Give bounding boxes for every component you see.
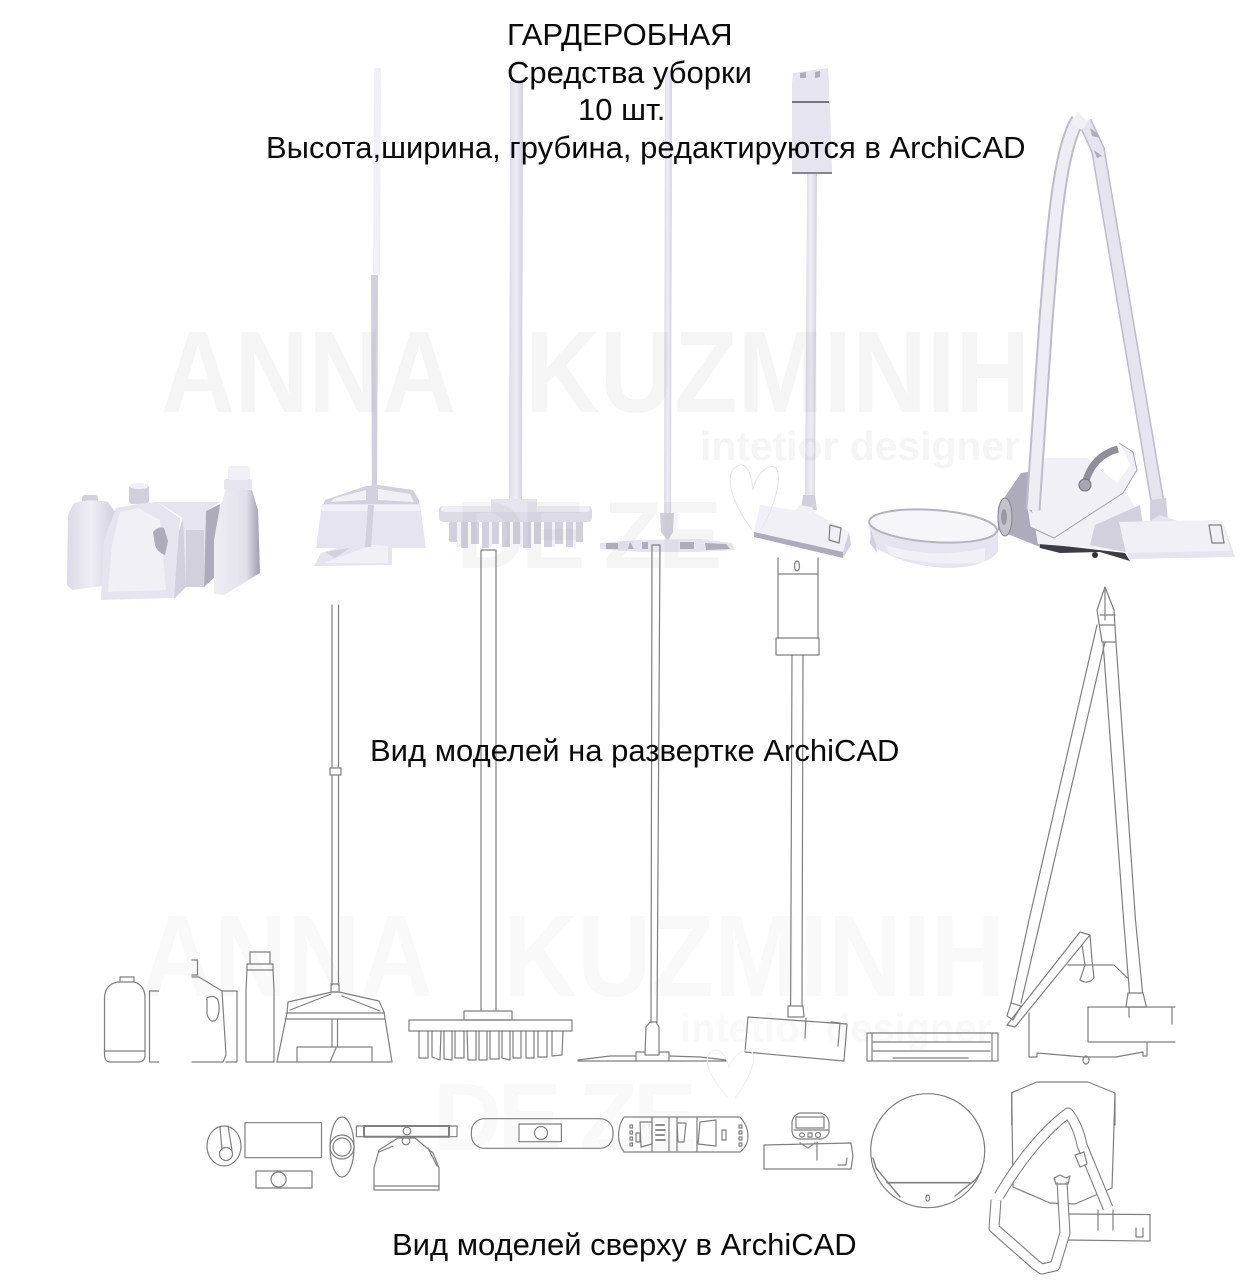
3D model: detergent bottles bbox=[67, 466, 260, 600]
plan drawing: flat mop bbox=[619, 1117, 748, 1152]
watermark: upper bbox=[161, 307, 1030, 589]
plan drawing: canister vacuum bbox=[1012, 1082, 1150, 1241]
watermark: lower bbox=[141, 891, 1005, 1171]
title block: 10 шт. bbox=[578, 92, 665, 127]
plan drawing: scrub brush bbox=[471, 1119, 613, 1148]
plan drawing: vacuum hose and handle bbox=[994, 1113, 1108, 1269]
3D model: steam mop bbox=[754, 68, 851, 558]
elevation drawing: bottles bbox=[104, 952, 274, 1062]
caption: elevation view: Вид моделей на развертке ArchiCAD bbox=[370, 733, 899, 768]
title block: Высота,ширина, грубина, редактируются в ArchiCAD bbox=[266, 130, 1026, 165]
caption: plan view: Вид моделей сверху в ArchiCAD bbox=[392, 1227, 857, 1262]
watermark: upper: intetior designer bbox=[700, 423, 1020, 469]
3D model: robot vacuum bbox=[868, 506, 998, 568]
elevation drawing: broom bbox=[277, 605, 392, 1062]
watermark: lower: ANNA bbox=[141, 891, 433, 1021]
3D model: flat mop bbox=[600, 70, 735, 552]
elevation drawing: flat mop bbox=[578, 545, 726, 1061]
title block bbox=[266, 17, 1026, 165]
3D model: broom and dustpan bbox=[314, 68, 426, 566]
elevation drawing: scrub brush bbox=[409, 550, 572, 1060]
title block: Средства уборки bbox=[507, 55, 752, 90]
3D model: scrub brush bbox=[439, 80, 592, 548]
elevation drawing: steam mop bbox=[745, 558, 847, 1061]
watermark: upper: ANNA bbox=[161, 307, 456, 437]
plan drawing: broom and dustpan bbox=[356, 1126, 457, 1190]
title block: ГАРДЕРОБНАЯ bbox=[507, 17, 733, 52]
watermark: lower: KUZMINIH bbox=[503, 891, 1005, 1021]
elevation drawing: robot vacuum side bbox=[867, 1033, 998, 1061]
plan drawing: steam mop bbox=[764, 1113, 853, 1169]
plan drawing: detergent bottles bbox=[207, 1117, 354, 1188]
3D model: canister vacuum cleaner bbox=[998, 111, 1235, 561]
watermark: lower: intetior designer bbox=[680, 1005, 992, 1051]
elevation drawing: canister vacuum bbox=[1007, 587, 1175, 1064]
watermark: upper: DE ZE bbox=[456, 482, 722, 589]
watermark: upper: KUZMINIH bbox=[525, 307, 1030, 437]
plan drawing: robot vacuum bbox=[871, 1094, 985, 1208]
watermark: lower: DE ZE bbox=[433, 1064, 697, 1171]
